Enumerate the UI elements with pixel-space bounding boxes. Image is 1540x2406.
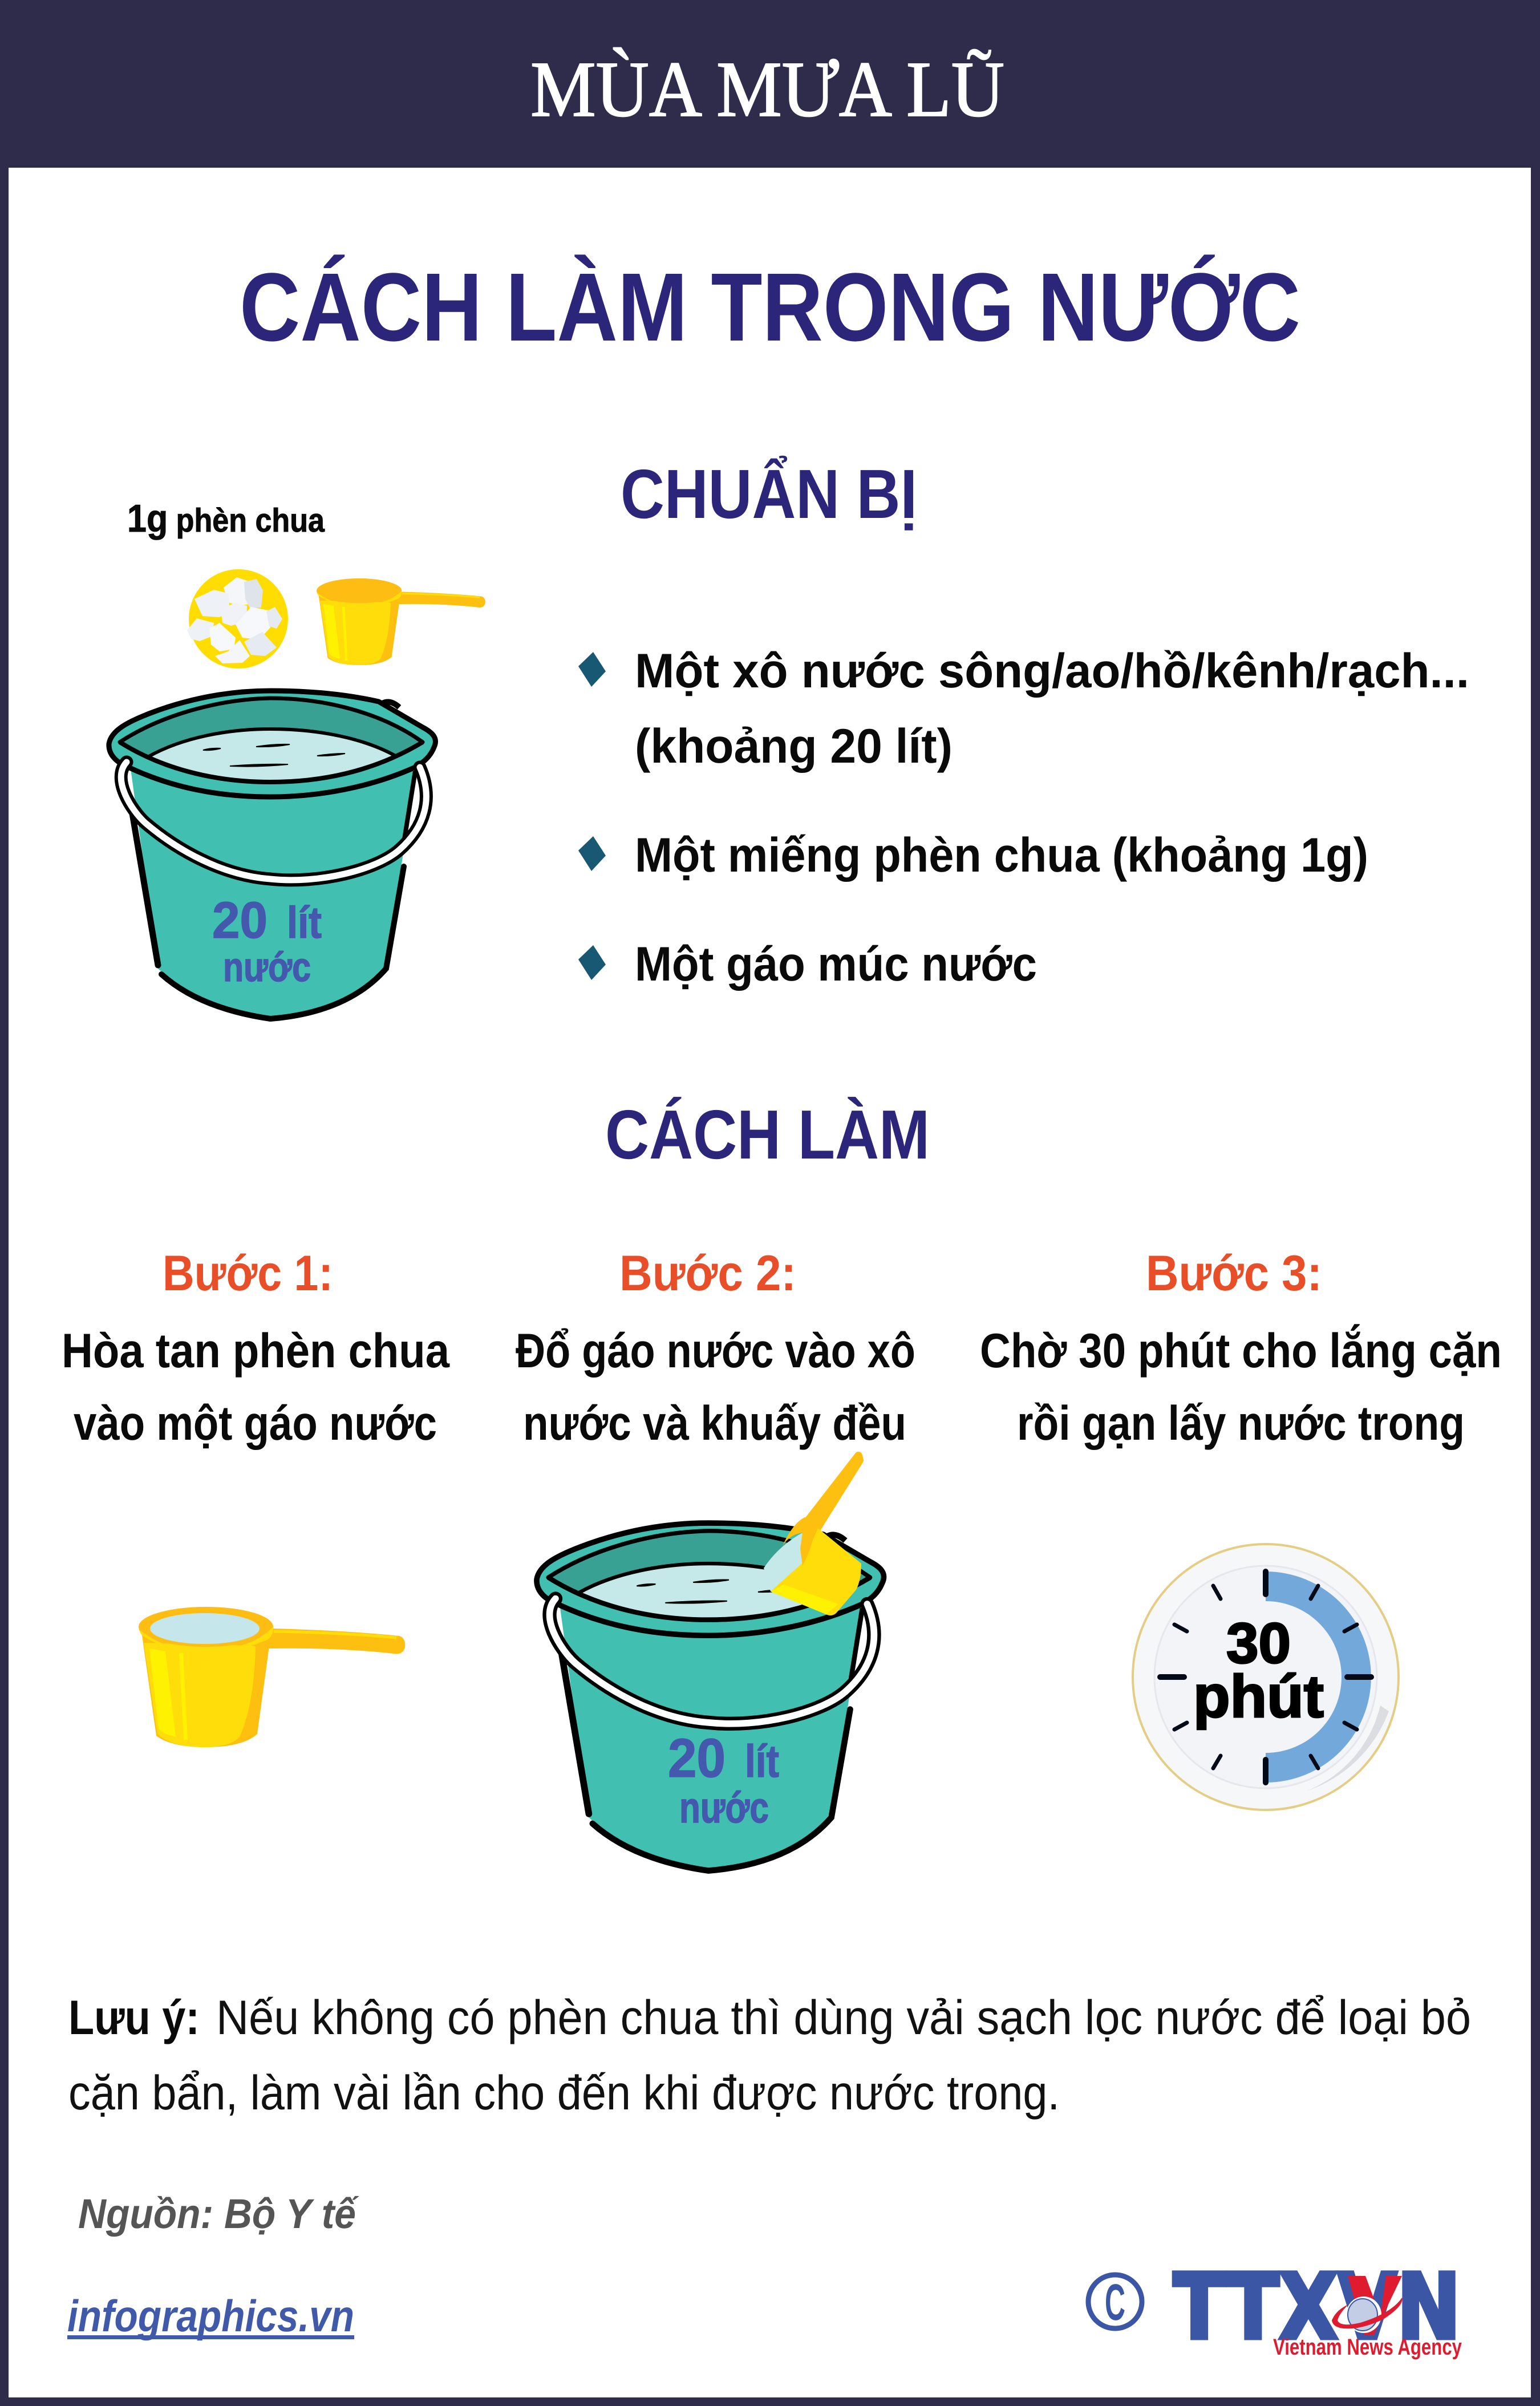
- icon: 30 minute clock: [1133, 1544, 1399, 1810]
- label: lít: lít: [287, 897, 322, 947]
- label: 1g alum: 1g phèn chua: [127, 497, 325, 540]
- label: nước: nước: [223, 945, 311, 990]
- heading: chuẩn bị: CHUẨN BỊ: [621, 455, 917, 533]
- panel: preparation illustration: [109, 497, 485, 1020]
- ladle water: [764, 1533, 807, 1591]
- logo: copyright mark: C: [1105, 2274, 1125, 2331]
- logo: copyright mark: [1088, 2274, 1142, 2331]
- label: 20: 20: [212, 892, 268, 949]
- source: Nguồn: Bộ Y tế: [78, 2191, 359, 2237]
- label: lít: lít: [745, 1736, 779, 1787]
- step 1 label: Bước 1:: [163, 1245, 333, 1301]
- panel: step 3: [980, 1245, 1502, 1810]
- label: nước: nước: [679, 1784, 769, 1832]
- bullet 1: [578, 652, 606, 687]
- bullet 3: [578, 945, 606, 980]
- logo globe: [1332, 2296, 1402, 2333]
- note bold label: Lưu ý:: [68, 1991, 200, 2045]
- bullet 2 text: Một miếng phèn chua (khoảng 1g): [635, 828, 1368, 882]
- step 3 label: Bước 3:: [1146, 1245, 1322, 1301]
- step 1 text line 2: vào một gáo nước: [74, 1396, 437, 1451]
- note line 2: cặn bẩn, làm vài lần cho đến khi được nước trong.: [68, 2066, 1060, 2120]
- bullet 1 text line 1: Một xô nước sông/ao/hồ/kênh/rạch...: [635, 644, 1469, 698]
- step 3 text line 2: rồi gạn lấy nước trong: [1017, 1396, 1465, 1451]
- icon: bucket of water: [109, 691, 436, 1020]
- panel: step 1: [62, 1245, 450, 1747]
- bullet 2: [578, 836, 606, 871]
- note text: [68, 1991, 1471, 2120]
- panel: preparation list: [578, 644, 1469, 991]
- icon: bucket with ladle: [537, 1456, 884, 1872]
- main title: CÁCH LÀM TRONG NƯỚC: [240, 253, 1300, 362]
- ladle handle: [805, 1456, 860, 1529]
- header band title: MÙA MƯA LŨ: [530, 46, 1004, 133]
- website link: infographics.vn: [67, 2291, 354, 2341]
- logo subtitle: Vietnam News Agency: [1273, 2335, 1462, 2360]
- step 2 text line 1: Đổ gáo nước vào xô: [516, 1324, 915, 1378]
- icon: ladle with water: [139, 1607, 405, 1747]
- icon: alum lumps: [187, 569, 288, 669]
- step 2 label: Bước 2:: [619, 1245, 796, 1301]
- bullet 1 text line 2: (khoảng 20 lít): [635, 719, 953, 773]
- panel: step 2: [516, 1245, 915, 1872]
- note line 1: Nếu không có phèn chua thì dùng vải sạch lọc nước để loại bỏ: [216, 1991, 1471, 2045]
- logo: TTXVN: TTXVN: [1173, 2255, 1461, 2360]
- logo red V: [1348, 2276, 1402, 2335]
- heading: cách làm: CÁCH LÀM: [605, 1096, 930, 1173]
- label: 20: 20: [668, 1728, 726, 1789]
- clock label: phút: phút: [1193, 1663, 1324, 1730]
- step 1 text line 1: Hòa tan phèn chua: [62, 1324, 450, 1378]
- step 2 text line 2: nước và khuấy đều: [523, 1396, 906, 1451]
- icon: ladle: [317, 578, 485, 665]
- bullet 3 text: Một gáo múc nước: [635, 937, 1037, 991]
- ladle body: [771, 1517, 861, 1615]
- clock label: 30: 30: [1226, 1611, 1291, 1675]
